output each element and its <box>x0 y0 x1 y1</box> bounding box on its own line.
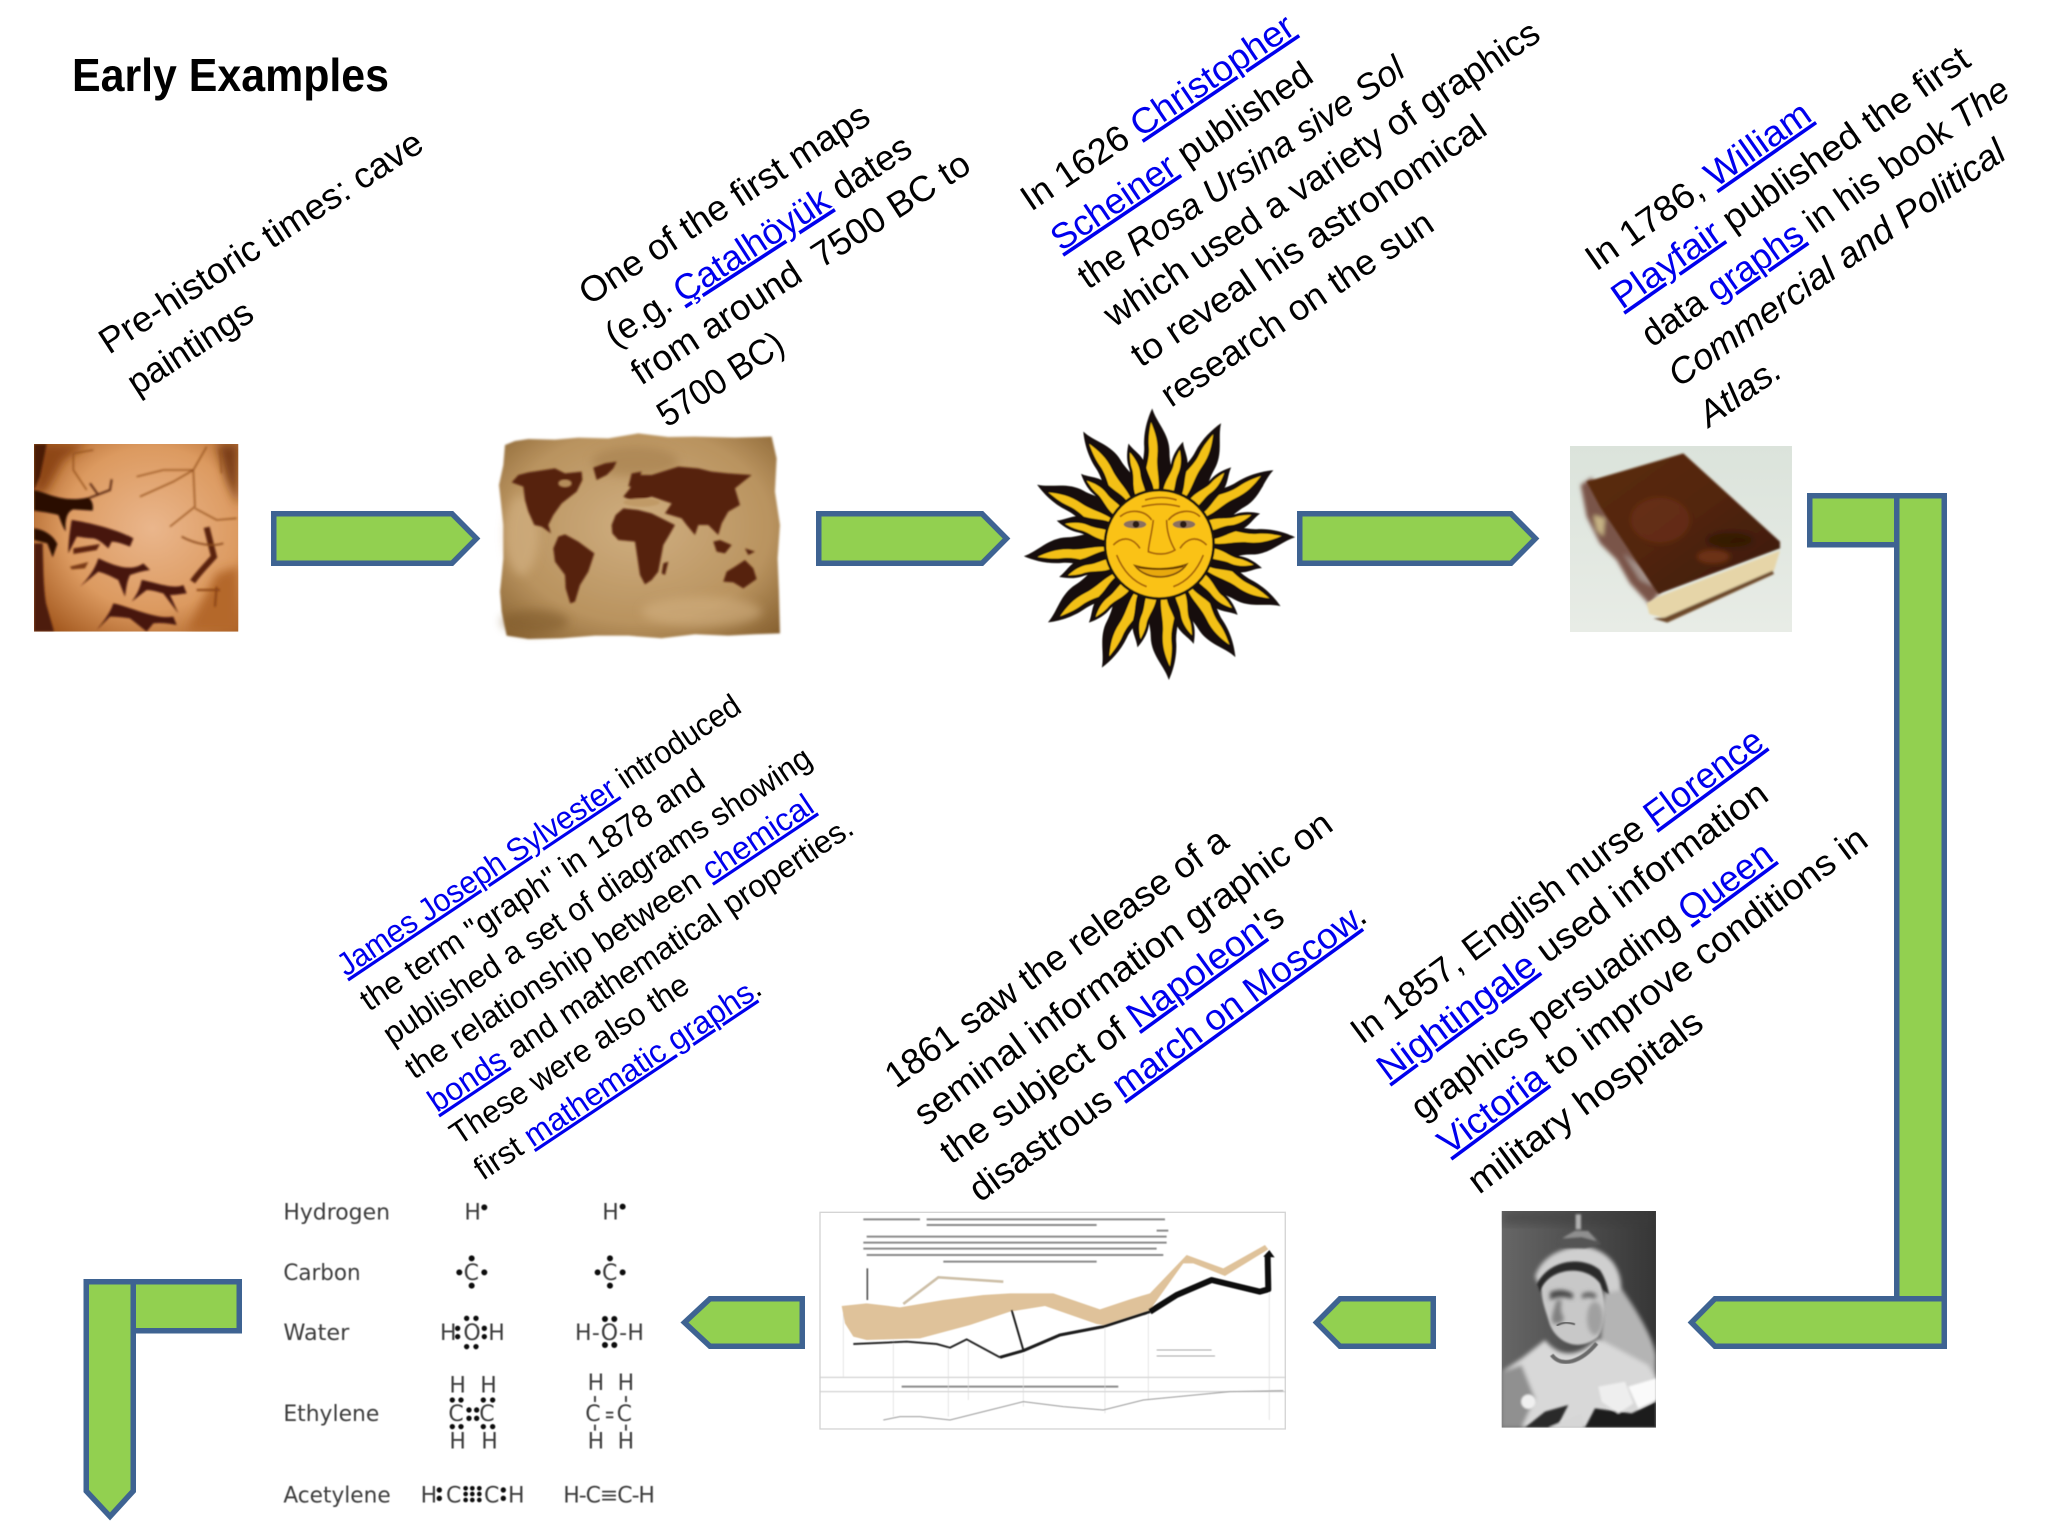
chart: chemical bonds table: C <box>585 1402 601 1427</box>
chart: chemical bonds table: H-C≡C-H <box>563 1483 655 1508</box>
text: Playfair: Commercial and Political <box>1660 130 2014 395</box>
chart: chemical bonds table: H <box>602 1200 619 1225</box>
chart: chemical bonds table: H-O-H <box>575 1321 644 1346</box>
chart: chemical bonds table: H <box>481 1429 498 1454</box>
text: Sylvester: James Joseph Sylvester introduced <box>330 687 747 983</box>
text: Napoleon march: 1861 saw the release of a <box>877 818 1236 1095</box>
text: first maps: (e.g. Çatalhöyük dates <box>597 126 919 355</box>
chart: chemical bonds table: Water <box>283 1321 350 1346</box>
text: Scheiner: which used a variety of graphics <box>1095 12 1547 335</box>
text: first maps: 5700 BC) <box>649 322 791 435</box>
chart: chemical bonds table: C <box>448 1402 464 1427</box>
text: Sylvester: the relationship between chemical <box>398 787 820 1086</box>
arrow 5 <box>1316 1299 1433 1346</box>
chart: chemical bonds table: O <box>463 1321 481 1346</box>
text: Scheiner: research on the sun <box>1153 202 1441 415</box>
left elbow arrow <box>86 1282 239 1516</box>
text: Napoleon march <box>877 802 1374 1209</box>
arrow 6 <box>684 1299 802 1346</box>
text: first maps: from around 7500 BC to <box>623 143 977 393</box>
image: world map on parchment <box>495 425 790 650</box>
chart: chemical bonds table: H <box>480 1373 497 1398</box>
chart: chemical bonds table: Acetylene <box>283 1483 391 1508</box>
text: Nightingale: military hospitals <box>1459 1001 1710 1201</box>
text: first maps <box>571 94 977 435</box>
text: Nightingale: Victoria to improve conditions in <box>1429 818 1875 1162</box>
text: cave paintings: paintings <box>119 291 260 403</box>
text: Playfair: data graphs in his book The <box>1633 69 2017 355</box>
text: Sylvester: published a set of diagrams showing <box>376 739 818 1052</box>
text: Sylvester: first mathematic graphs. <box>467 969 768 1187</box>
image: old book <box>1570 446 1792 632</box>
text: Sylvester: bonds and mathematical properties. <box>421 809 860 1119</box>
text: Playfair: In 1786, William <box>1577 92 1818 279</box>
chart: chemical bonds table: H <box>618 1371 634 1396</box>
chart: chemical bonds table: C <box>464 1261 479 1286</box>
text: Nightingale: In 1857, English nurse Florence <box>1342 719 1771 1051</box>
chart: chemical bonds table: H <box>618 1429 634 1454</box>
text: Nightingale <box>1342 719 1875 1201</box>
chart: chemical bonds table: C <box>484 1483 499 1508</box>
text: Nightingale: Nightingale used information <box>1368 772 1775 1088</box>
text: Sylvester: the term "graph" in 1878 and <box>353 761 711 1018</box>
text: Sylvester <box>330 687 860 1187</box>
text: Napoleon march: seminal information graphic on <box>906 802 1340 1133</box>
text: Playfair: Atlas. <box>1688 348 1789 436</box>
chart: chemical bonds table: H <box>449 1373 466 1398</box>
title: Early Examples <box>72 49 389 101</box>
arrow 1 <box>274 514 476 563</box>
text: Scheiner <box>1013 5 1547 415</box>
right elbow arrow <box>1692 496 1944 1346</box>
chart: chemical bonds table: C <box>617 1402 632 1427</box>
text: Napoleon march: disastrous march on Moscow. <box>961 894 1374 1209</box>
chart: chemical bonds table: H <box>488 1321 505 1346</box>
image: Queen Victoria portrait <box>1502 1211 1656 1428</box>
text: Playfair: Playfair published the first <box>1603 37 1977 317</box>
chart: chemical bonds table: H <box>588 1371 604 1396</box>
chart: chemical bonds table: C <box>446 1483 461 1508</box>
chart: chemical bonds table: Hydrogen <box>283 1200 390 1225</box>
chart: chemical bonds table: C <box>479 1402 495 1427</box>
arrow 2 <box>819 514 1006 563</box>
chart: chemical bonds table: H <box>440 1321 457 1346</box>
chart: Minard map of Napoleon's march <box>820 1212 1285 1429</box>
text: Scheiner: Scheiner published <box>1043 53 1320 259</box>
chart: chemical bonds table <box>283 1200 655 1508</box>
image: sun with face <box>1020 407 1297 685</box>
chart: chemical bonds table: Ethylene <box>283 1402 379 1427</box>
text: Playfair <box>1577 37 2017 436</box>
text: Napoleon march: the subject of Napoleon's <box>932 894 1291 1171</box>
text: Scheiner: In 1626 Christopher <box>1013 5 1302 219</box>
arrow 3 <box>1300 514 1536 563</box>
image: cave painting <box>34 444 238 632</box>
text: Scheiner: to reveal his astronomical <box>1123 106 1494 375</box>
text: Sylvester: These were also the <box>443 966 696 1152</box>
chart: chemical bonds table: H <box>588 1429 604 1454</box>
chart: chemical bonds table: H <box>449 1429 466 1454</box>
chart: chemical bonds table: C <box>602 1261 617 1286</box>
chart: chemical bonds table: H <box>464 1200 481 1225</box>
text: Nightingale: graphics persuading Queen <box>1402 833 1780 1127</box>
text: first maps: One of the first maps <box>571 94 877 313</box>
text: Scheiner: the Rosa Ursina sive Sol <box>1070 47 1412 297</box>
text: cave paintings: Pre-historic times: cave <box>91 121 430 362</box>
chart: chemical bonds table: H <box>421 1483 437 1508</box>
chart: chemical bonds table: Carbon <box>283 1261 361 1286</box>
chart: chemical bonds table: H <box>508 1483 525 1508</box>
